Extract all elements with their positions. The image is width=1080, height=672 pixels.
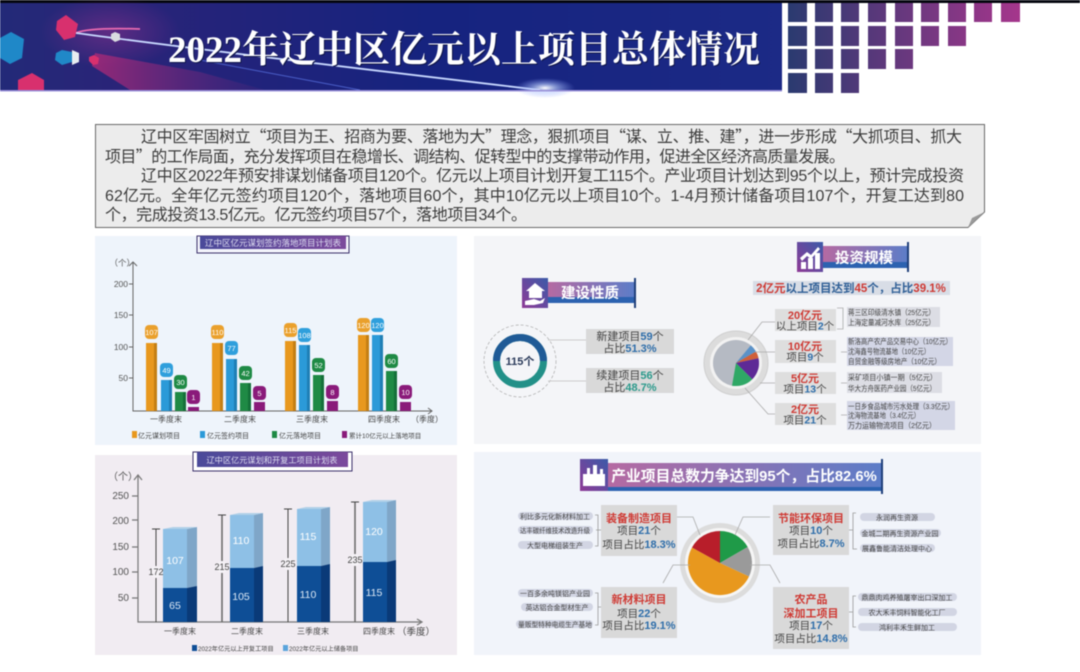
panel: signing and landing bar chart: 四季度末: [368, 414, 400, 424]
callout: 10亿元: 10亿元: [788, 339, 822, 353]
callout: agricultural processing: 项目占比14.8%: [774, 632, 848, 645]
callout: equipment manufacturing: 项目占比18.3%: [602, 538, 676, 551]
bars: Q3: 52: [314, 361, 323, 370]
panel: start and resumption stacked chart: 二季度末: [231, 626, 263, 636]
callout: continued projects: [586, 368, 674, 394]
pie chart: industry split: [680, 523, 760, 603]
callout: 5亿元: [775, 371, 836, 396]
bars: Q4: 60: [387, 357, 396, 366]
callout: 5亿元: 项目13个: [783, 384, 827, 396]
panel: intro text: 项目”的工作局面，充分发挥项目在稳增长、调结构、促转型中的支撑带动作用，促进全区经济高质量发展。: [105, 143, 845, 167]
panel: industrial projects: [474, 452, 981, 655]
list: energy projects: 展鑫鲁能清洁处理中心: [862, 544, 932, 553]
stacked bar: Q3: 225: [280, 559, 296, 569]
stacked bar: Q2: 110: [233, 535, 250, 547]
panel: intro text: 62亿元。全年亿元签约项目120个，落地项目60个，其中10亿元以上项目10个。1-4月预计储备项目107个，开复工达到80: [105, 187, 964, 205]
chart title: 辽中区亿元谋划和开复工项目计划表: [206, 455, 338, 465]
project list: 5亿元: [847, 372, 942, 393]
stacked bar: Q1: 172: [148, 567, 164, 577]
donut chart: 115 projects: [484, 325, 556, 397]
panel: start and resumption stacked chart: （季度）: [397, 626, 435, 638]
donut chart: 115 projects: 115个: [506, 355, 534, 368]
legend: 2022年亿元以上开复工项目: [198, 645, 274, 653]
list: agriculture projects: [858, 593, 957, 632]
bars: Q4: 120: [371, 321, 384, 330]
callout: agricultural processing: [773, 587, 849, 649]
panel: start and resumption stacked chart: 50: [118, 593, 129, 604]
bars: Q1: 107: [145, 328, 158, 337]
bars: Q4: 10: [401, 388, 410, 397]
callout: new materials: 项目占比19.1%: [602, 619, 676, 632]
callout: 20亿元: 20亿元: [788, 308, 822, 322]
project list: 5亿元: 采矿项目小镇一期（5亿元）: [848, 372, 937, 382]
decorative square grid: [788, 3, 1020, 93]
icon: cubes: [0, 15, 120, 90]
list: agriculture projects: 农大禾丰饲料智能化工厂: [868, 608, 946, 617]
stacked bar: Q4: [347, 500, 396, 622]
callout: 2亿元: 项目21个: [783, 414, 827, 426]
bars: Q3: [284, 323, 339, 411]
icon: factory: [583, 465, 605, 486]
panel: construction type and investment scale: [474, 236, 981, 444]
callout: energy saving: [773, 505, 849, 555]
bars: Q2: 77: [227, 344, 236, 353]
panel: start and resumption stacked chart: 200: [112, 516, 129, 527]
callout: energy saving: 节能环保项目: [778, 511, 844, 525]
callout: new projects: [586, 329, 674, 355]
bars: Q3: 115: [285, 326, 296, 335]
callout: equipment manufacturing: 项目21个: [617, 525, 661, 537]
stacked bar: Q2: [214, 513, 263, 622]
heading: investment scale: 投资规模: [835, 249, 893, 267]
heading: construction type: [522, 278, 636, 308]
panel: signing and landing bar chart: （个）: [109, 258, 135, 268]
callout: 20亿元: [775, 308, 836, 332]
panel: signing and landing bar chart: 100: [114, 342, 128, 352]
stacked bar: Q1: [148, 527, 197, 622]
panel: signing and landing bar chart: 50: [119, 373, 128, 383]
panel: start and resumption stacked chart: 100: [112, 567, 129, 578]
list: equipment projects: 利比多元化新材料加工: [520, 512, 590, 521]
callout: 10亿元: 项目9个: [786, 352, 824, 364]
stacked bar: Q4: 120: [365, 526, 383, 538]
panel: intro text: [96, 123, 984, 228]
project list: 20亿元: 上海定量减河水库（25亿元）: [848, 317, 935, 327]
stacked bar: Q2: 105: [232, 591, 250, 603]
legend: 亿元签约项目: [207, 431, 249, 440]
callout: continued projects: 续建项目56个: [596, 368, 664, 382]
chart title: [193, 452, 352, 471]
callout: continued projects: 占比48.7%: [603, 380, 657, 394]
callout: new projects: 新建项目59个: [596, 329, 664, 343]
legend: 2022年亿元以上储备项目: [289, 645, 358, 653]
project list: 2亿元: [847, 401, 955, 430]
bars: Q2: 5: [257, 389, 262, 398]
bars: Q2: [211, 325, 266, 411]
list: material projects: 英达铝合金型材生产: [526, 603, 588, 612]
icon: house in hand: [525, 283, 545, 305]
summary line: 2亿元以上项目达到45个，占比39.1%: [756, 281, 946, 295]
list: material projects: 量贩型特种电缆生产基地: [518, 620, 592, 629]
callout: 20亿元: 以上项目2个: [776, 320, 835, 332]
bars: Q3: 108: [298, 331, 311, 340]
stacked bar: Q4: 235: [347, 555, 363, 565]
callout: new projects: 占比51.3%: [603, 341, 657, 355]
heading: investment scale: [797, 242, 909, 272]
title: 2022年辽中区亿元以上项目总体情况: [168, 29, 760, 71]
legend: [192, 645, 358, 653]
legend: [132, 431, 421, 440]
axes: [132, 475, 422, 625]
list: energy projects: 金城二期再生资源产业园: [862, 529, 938, 538]
list: agriculture projects: 鸿利丰禾生鲜加工: [879, 623, 935, 632]
heading: industrial projects: [580, 459, 883, 494]
heading: industrial projects: 产业项目总数力争达到95个，占比82.6%: [611, 467, 877, 485]
panel: signing and landing bar chart: 三季度末: [296, 414, 328, 424]
stacked bar: Q3: 115: [300, 531, 317, 543]
list: equipment projects: [518, 512, 593, 550]
panel: signing and landing bar chart: 一季度末: [150, 414, 182, 424]
stacked bar: Q1: 107: [166, 555, 184, 567]
bars: Q2: 42: [241, 369, 250, 378]
project list: 10亿元: 沈海鑫号物流基地（10亿元）: [848, 346, 930, 356]
project list: 5亿元: 华大方舟医药产业园（5亿元）: [848, 383, 936, 393]
panel: signing and landing bar chart: 200: [114, 279, 128, 289]
list: material projects: 一百多余吨镁铝产业园: [520, 589, 590, 598]
callout: new materials: 新材料项目: [612, 592, 666, 606]
panel: start and resumption stacked chart: [95, 452, 457, 655]
project list: 10亿元: 新洛高产农产品交易中心（10亿元）: [848, 336, 952, 346]
panel: signing and landing bar chart: 150: [114, 310, 128, 320]
heading: construction type: 建设性质: [561, 284, 619, 302]
callout: 2亿元: [775, 402, 836, 426]
bars: Q3: 8: [330, 388, 335, 397]
callout: new materials: [601, 587, 677, 638]
panel: signing and landing bar chart: （季度）: [411, 414, 443, 424]
bars: Q1: 1: [191, 393, 196, 402]
bars: Q1: [145, 325, 200, 411]
stacked bar: Q2: 215: [214, 562, 230, 572]
callout: energy saving: 项目10个: [789, 525, 833, 537]
list: energy projects: 永润再生资源: [876, 513, 918, 522]
axes: [129, 262, 432, 414]
stacked bar: Q3: [280, 507, 330, 622]
bars: Q4: [357, 318, 412, 411]
panel: start and resumption stacked chart: 150: [112, 542, 129, 553]
callout: agricultural processing: 农产品: [794, 592, 828, 606]
pie chart: investment scale: [704, 331, 768, 395]
callout: equipment manufacturing: 装备制造项目: [606, 511, 672, 525]
chart title: 辽中区亿元谋划签约落地项目计划表: [205, 238, 341, 248]
panel: start and resumption stacked chart: 一季度末: [164, 626, 196, 636]
project list: 2亿元: 一日乡食品城市污水处理（3.3亿元）: [848, 401, 954, 411]
list: equipment projects: 达丰碳纤维技术改造升级: [520, 526, 590, 535]
legend: 累计10亿元以上落地项目: [349, 431, 421, 440]
callout: energy saving: 项目占比8.7%: [777, 537, 845, 550]
panel: intro text: 辽中区牢固树立“项目为王、招商为要、落地为大”理念，狠抓项目“谋、立、推、建”，进一步形成“大抓项目、抓大: [141, 123, 962, 147]
callout: 10亿元: [775, 339, 836, 364]
panel: signing and landing bar chart: [95, 236, 457, 445]
callout: agricultural processing: 深加工项目: [784, 606, 838, 620]
bars: Q2: 110: [212, 328, 223, 337]
bars: Q4: 120: [357, 321, 370, 330]
project list: 10亿元: [847, 336, 953, 366]
callout: 2亿元: 2亿元: [791, 402, 819, 416]
header banner: [0, 0, 1080, 98]
panel: start and resumption stacked chart: 三季度末: [297, 626, 329, 636]
list: material projects: [516, 589, 593, 629]
panel: intro text: 个，完成投资13.5亿元。亿元签约项目57个，落地项目34个。: [105, 206, 527, 224]
panel: start and resumption stacked chart: （个）: [108, 471, 138, 483]
callout: equipment manufacturing: [601, 505, 677, 556]
list: equipment projects: 大型电梯组装生产: [527, 541, 583, 550]
panel: start and resumption stacked chart: 四季度末: [363, 626, 395, 636]
panel: intro text: 辽中区2022年预安排谋划储备项目120个。亿元以上项目计划开复工115个。产业项目计划达到95个以上，预计完成投资: [141, 167, 964, 185]
project list: 20亿元: [847, 307, 940, 327]
stacked bar: Q4: 115: [366, 587, 383, 599]
legend: 亿元落地项目: [279, 431, 321, 440]
list: energy projects: [860, 513, 941, 553]
callout: new materials: 项目22个: [617, 608, 661, 620]
project list: 2亿元: 沈海物流基地（3.4亿元）: [848, 410, 920, 420]
project list: 10亿元: 自贸金融等级房地产（10亿元）: [848, 356, 941, 366]
legend: 亿元谋划项目: [138, 431, 180, 440]
panel: signing and landing bar chart: 二季度末: [224, 414, 256, 424]
panel: start and resumption stacked chart: 250: [112, 491, 129, 502]
callout: agricultural processing: 项目17个: [789, 620, 833, 632]
list: agriculture projects: 鼎鼎肉鸡养殖屠宰出口深加工: [862, 593, 952, 602]
stacked bar: Q1: 65: [169, 600, 181, 612]
callout: 5亿元: 5亿元: [791, 371, 819, 385]
project list: 2亿元: 万力运输物流项目（2亿元）: [848, 420, 936, 430]
icon: growth chart: [800, 247, 820, 269]
stacked bar: Q3: 110: [300, 589, 317, 601]
bars: Q1: 49: [162, 366, 171, 375]
bars: Q1: 30: [176, 378, 185, 387]
project list: 20亿元: 蒋三区印级清水镇（25亿元）: [848, 307, 935, 317]
chart title: [197, 236, 349, 253]
